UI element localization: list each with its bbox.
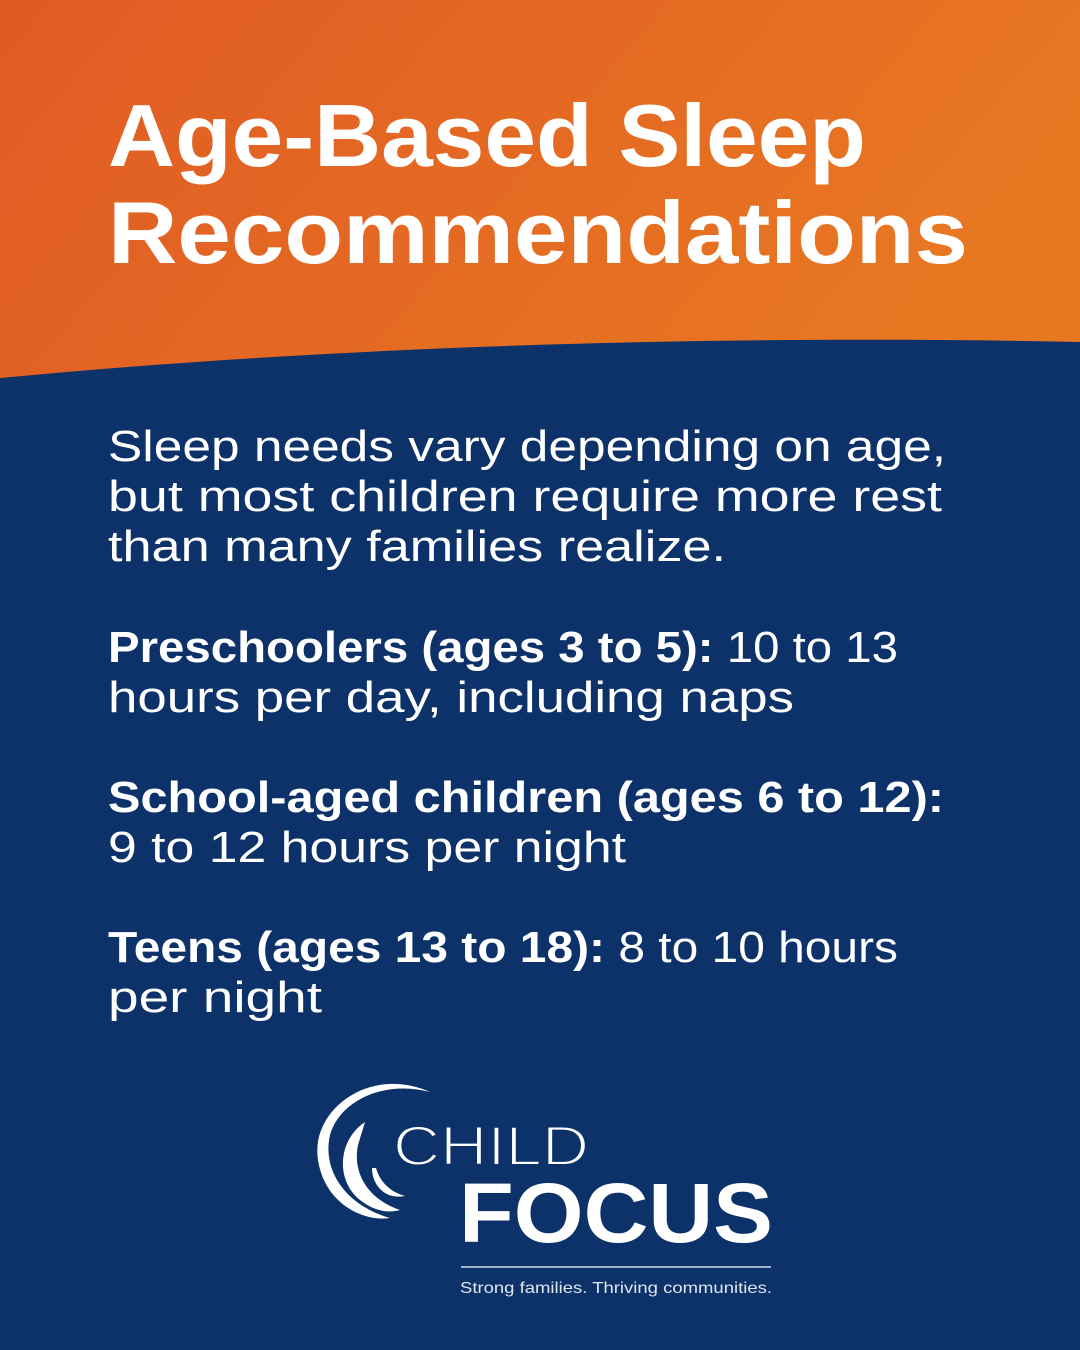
item: preschoolers [108, 623, 898, 722]
intro text: but most children require more rest [108, 472, 942, 521]
item: teens [108, 923, 898, 1022]
logo text: CHILD [393, 1114, 589, 1177]
item: teens: per night [108, 973, 322, 1022]
title: Age-Based Sleep [108, 86, 866, 185]
intro text: Sleep needs vary depending on age, [108, 422, 946, 471]
item: teens: Teens (ages 13 to 18): 8 to 10 hours [108, 923, 898, 972]
item: school-aged [108, 773, 944, 872]
item: preschoolers: Preschoolers (ages 3 to 5): 10 to 13 [108, 623, 898, 672]
logo: Strong families. Thriving communities. [460, 1280, 772, 1297]
item: preschoolers: hours per day, including naps [108, 673, 794, 722]
orange header band [0, 0, 1080, 378]
item: school-aged: School-aged children (ages 6 to 12): [108, 773, 944, 822]
intro text [108, 422, 946, 571]
logo [317, 1084, 773, 1297]
item: school-aged: 9 to 12 hours per night [108, 823, 626, 872]
title [108, 86, 968, 282]
logo: FOCUS [459, 1166, 773, 1260]
icon: arcs [317, 1084, 430, 1219]
title: Recommendations [108, 183, 968, 282]
intro text: than many families realize. [108, 522, 726, 571]
